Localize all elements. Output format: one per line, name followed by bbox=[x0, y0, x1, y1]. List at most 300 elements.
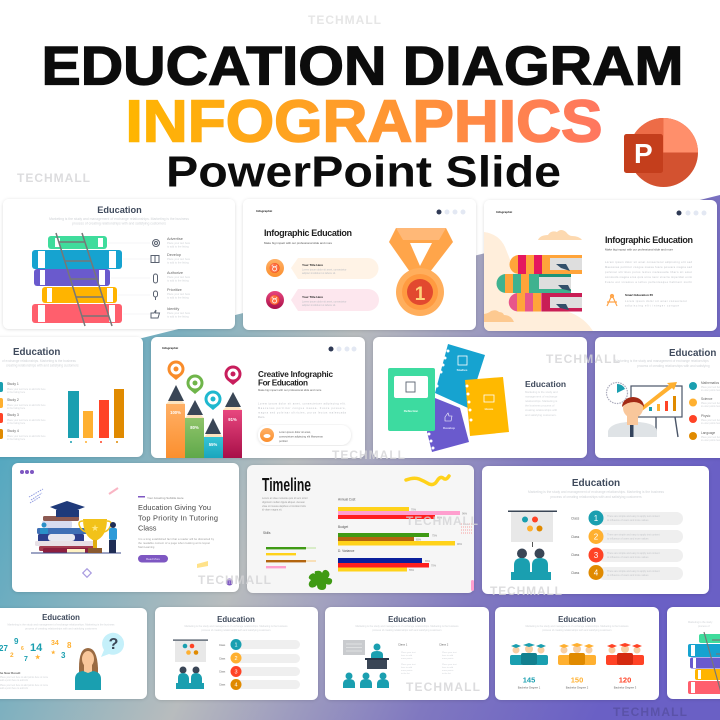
floating numbers: 14 bbox=[30, 642, 43, 654]
ladder bbox=[56, 233, 112, 326]
teacher figure bbox=[365, 644, 389, 669]
speech bubble bbox=[101, 633, 124, 657]
statistics bbox=[523, 676, 631, 684]
pagination dots bbox=[436, 210, 466, 214]
paragraph bbox=[262, 497, 308, 512]
floating numbers: 34 bbox=[51, 640, 59, 647]
study list: to the listing here bbox=[7, 422, 26, 425]
blue note bbox=[435, 344, 485, 408]
description bbox=[49, 217, 189, 226]
item descriptions: to add to the listing bbox=[167, 296, 189, 300]
pencils bbox=[166, 385, 242, 458]
class columns: Place your text bbox=[442, 663, 457, 666]
slide: numbers and question bbox=[0, 608, 147, 699]
statistics: 150 bbox=[571, 676, 583, 684]
projector screen bbox=[173, 640, 208, 662]
gradient background bbox=[0, 195, 720, 720]
pencils: 91% bbox=[228, 417, 237, 422]
callout: orange: Lorem ipsum dolor sit amet, consectetur bbox=[302, 268, 347, 272]
item descriptions: Place your text here bbox=[167, 292, 191, 296]
result text: add a point here to add info bbox=[0, 679, 29, 682]
bars bbox=[68, 389, 124, 443]
result text: add a point here to add info bbox=[0, 687, 29, 690]
class columns: here to add bbox=[442, 654, 454, 657]
decorations bbox=[29, 488, 208, 577]
class labels: Class bbox=[219, 644, 226, 647]
paragraph bbox=[258, 402, 347, 419]
heading: Education bbox=[558, 615, 596, 624]
callout: pink bbox=[266, 289, 379, 311]
subject list: Language bbox=[701, 431, 715, 435]
watermarks bbox=[17, 13, 620, 694]
class columns: Class 1 bbox=[398, 642, 408, 646]
floating numbers: ★ bbox=[51, 650, 56, 656]
title: Infographics: INFOGRAPHICS bbox=[126, 88, 602, 154]
paragraph: It is a long established fact that a reader will be distracted by bbox=[138, 537, 215, 541]
slide: bar chart bbox=[0, 337, 143, 457]
numbered circles: 3 bbox=[234, 670, 238, 676]
heading: Education bbox=[217, 615, 255, 624]
paragraph: management of exchange bbox=[525, 394, 558, 398]
paragraph: vitae sit massa dapibus ut tincidunt felis bbox=[262, 505, 307, 508]
annual cost chart: Annual Cost bbox=[338, 498, 355, 502]
description: Marketing is the study and management of exchange relationships. Marketing is the business bbox=[528, 490, 664, 494]
numbered circles: 4 bbox=[594, 568, 599, 578]
callout: orange: Your Title Here bbox=[302, 263, 323, 267]
connector lines bbox=[108, 243, 150, 314]
pill text: to influence of users and more values bbox=[607, 538, 649, 540]
yellow note: Ideate bbox=[485, 407, 494, 411]
class columns: more points bbox=[401, 669, 413, 672]
slides collage bbox=[0, 199, 720, 700]
numbered circles: 1 bbox=[594, 514, 599, 523]
description: process of creating relationships with and satisfying customers bbox=[201, 629, 271, 632]
budget chart: 75% bbox=[432, 534, 438, 538]
class columns: to the list bbox=[401, 672, 410, 675]
subject list bbox=[689, 381, 720, 442]
statistic labels bbox=[518, 686, 637, 690]
description: process of creating relationships with and satisfying customers bbox=[550, 495, 642, 499]
heading: Class bbox=[138, 524, 157, 532]
paragraph: relationships. Marketing is bbox=[525, 399, 558, 403]
callout: pink: adipisci incididunt ut labore sit. bbox=[302, 304, 336, 307]
class labels: Class bbox=[219, 658, 226, 660]
statistics: 120 bbox=[619, 676, 631, 684]
students bbox=[511, 548, 551, 580]
description: of exchange relationships. Marketing is the business bbox=[2, 359, 76, 363]
class labels bbox=[571, 516, 580, 575]
green card bbox=[388, 368, 435, 431]
class columns bbox=[398, 642, 457, 675]
budget chart bbox=[338, 525, 463, 546]
annual cost chart bbox=[338, 498, 468, 520]
cloud: top bbox=[538, 230, 582, 240]
title: PowerPoint Slide: PowerPoint Slide bbox=[166, 148, 561, 196]
numbered circles bbox=[588, 510, 604, 580]
brand label: Infographic bbox=[496, 210, 513, 214]
item descriptions bbox=[167, 241, 191, 318]
heading bbox=[138, 503, 218, 532]
item labels: Prioritize bbox=[167, 288, 182, 292]
slide: stacked books with text bbox=[484, 200, 717, 331]
result text bbox=[0, 671, 49, 690]
purple note: Develop bbox=[443, 426, 455, 430]
watermark: dark: TECHMALL bbox=[613, 705, 687, 719]
statistic labels: Bachelor Degree 2 bbox=[566, 686, 589, 690]
description: Marketing is the study bbox=[688, 621, 713, 624]
green card: Reflection bbox=[404, 409, 418, 413]
paragraph: the readable content of a page when looking at its layout bbox=[138, 541, 210, 545]
graduation cap bbox=[50, 501, 85, 517]
pill text: There are simple and easy to apply text content bbox=[607, 552, 660, 555]
whiteboard bbox=[343, 640, 365, 655]
description: Marketing is the study and management of exchange relationships. Marketing is the business bbox=[49, 217, 189, 221]
callout: pink: Lorem ipsum dolor sit amet, consectetur bbox=[302, 300, 347, 304]
paragraph: Lorem ipsum dolor sit amet consectetur adipiscing elit sed bbox=[605, 260, 693, 264]
callout: orange: ♉ bbox=[269, 262, 281, 273]
variance chart bbox=[338, 549, 437, 572]
icon: compass bbox=[607, 294, 617, 306]
heading: Education bbox=[525, 379, 566, 389]
subject list: Science bbox=[701, 397, 713, 401]
paragraph: dignissim nullam ligula aliquet. Aenean bbox=[262, 501, 306, 504]
description bbox=[525, 625, 629, 632]
slide: presenter bbox=[595, 337, 720, 458]
slide: medal bbox=[243, 199, 476, 330]
pill text bbox=[607, 515, 660, 577]
description bbox=[2, 359, 79, 368]
graduates: teal bbox=[510, 643, 548, 665]
heading: Education bbox=[572, 478, 620, 489]
floating numbers bbox=[0, 637, 72, 663]
description: Marketing is the study and management of exchange relationships. Marketing is the business bbox=[525, 625, 629, 628]
description: process of creating relationships with and satisfying customers bbox=[372, 629, 442, 632]
subheading: Make big impact with our professional slide and more bbox=[264, 241, 333, 245]
description: Marketing is the study and management of exchange relationships. Marketing is the business bbox=[355, 625, 459, 628]
class labels: Class bbox=[571, 516, 580, 520]
books illustration bbox=[31, 516, 121, 554]
class columns: to the list bbox=[442, 672, 451, 675]
callout: pink: Your Title Here bbox=[302, 295, 323, 299]
skills chart bbox=[263, 531, 316, 568]
yellow note bbox=[465, 377, 509, 436]
class labels: Class bbox=[571, 535, 580, 539]
seated student bbox=[40, 522, 48, 534]
class columns: Place your text bbox=[442, 651, 457, 654]
heading bbox=[258, 370, 333, 388]
class columns: more points bbox=[442, 657, 454, 660]
slide: cropped books bbox=[667, 607, 720, 699]
pill text: There are simple and easy to apply text content bbox=[607, 570, 660, 573]
watermarks: TECHMALL bbox=[17, 171, 90, 185]
clock bbox=[606, 382, 628, 404]
heading: Timeline bbox=[262, 475, 311, 495]
numbered circles: 2 bbox=[234, 656, 238, 662]
study list: to the listing here bbox=[7, 407, 26, 410]
green splash bbox=[309, 570, 332, 590]
icons bbox=[151, 240, 160, 318]
books illustration bbox=[496, 255, 582, 312]
pill text: There are simple and easy to apply text content bbox=[607, 534, 660, 536]
item labels: Develop bbox=[167, 253, 181, 257]
paragraph: Lorem ipsum dolor sit amet, consectetuer adipiscing elit. bbox=[258, 402, 346, 406]
paragraph: Start Learning bbox=[138, 545, 155, 549]
paragraph: commodo magna eros quis urna nunc viverra imperdiet enim bbox=[605, 275, 692, 279]
class columns: here to add bbox=[401, 666, 413, 669]
trophy bbox=[79, 519, 111, 553]
page number bbox=[226, 578, 233, 586]
description bbox=[688, 621, 713, 628]
description: Marketing is the study and management of exchange relationships. Marketing is the business bbox=[8, 622, 115, 626]
paragraph: Fusce est vivamus a tellus pellentesque habitant morbi bbox=[605, 280, 692, 284]
yellow squiggle bbox=[406, 476, 449, 485]
result text: Place your text here to add points here or more bbox=[0, 684, 49, 687]
watermarks: TECHMALL bbox=[332, 448, 405, 462]
presenter figure bbox=[608, 397, 657, 437]
item descriptions: Place your text here bbox=[167, 275, 191, 279]
slide: notebook cards bbox=[373, 337, 587, 458]
paragraph: creating relationships with bbox=[525, 408, 558, 412]
pencils: 80% bbox=[190, 425, 199, 430]
dot grid bbox=[461, 524, 472, 533]
numbered circles: 1 bbox=[234, 642, 238, 648]
item descriptions: Place your text here bbox=[167, 311, 191, 315]
paragraph: Maecenas porttitor congue massa fusce posuere magna sed bbox=[605, 265, 693, 269]
watermarks: TECHMALL bbox=[490, 584, 562, 598]
item descriptions: to add to the listing bbox=[167, 314, 189, 318]
study list: Place your text here to add info here bbox=[7, 388, 46, 391]
feature text: adipiscing elit integer congue bbox=[625, 304, 680, 308]
paragraph: id vitae magna sit. bbox=[262, 508, 282, 512]
paragraph: pulvinar ultricies purus lectus malesuada libero sit amet bbox=[605, 270, 692, 274]
class labels bbox=[219, 644, 226, 686]
variance chart: 70% bbox=[431, 564, 437, 568]
class labels: Class bbox=[571, 571, 580, 575]
binding holes bbox=[428, 350, 472, 450]
statistic labels: Bachelor Degree 3 bbox=[614, 686, 637, 690]
heading: Education bbox=[388, 615, 426, 624]
pagination dots bbox=[328, 346, 356, 352]
callout: orange: adipisci incididunt ut labore sit. bbox=[302, 272, 336, 275]
slide: class list bbox=[482, 466, 709, 594]
heading: Top Priority In Tutoring bbox=[138, 514, 218, 522]
item labels: Identify bbox=[167, 307, 179, 311]
student figures bbox=[343, 672, 389, 688]
annual cost chart: 96% bbox=[462, 512, 468, 516]
woman figure bbox=[75, 648, 101, 690]
budget chart: 90% bbox=[457, 543, 463, 546]
class labels: Class bbox=[219, 684, 226, 686]
slide: books and ladder bbox=[3, 199, 235, 329]
heading: For Education bbox=[258, 378, 308, 388]
watermarks: TECHMALL bbox=[308, 13, 381, 27]
feature text bbox=[625, 293, 687, 308]
floating numbers: 2 bbox=[10, 652, 14, 659]
floating numbers: 6 bbox=[21, 646, 24, 652]
icon: PowerPoint logo bbox=[624, 118, 698, 187]
description: process of creating relationships with and satisfying customers bbox=[25, 626, 98, 630]
description: process of bbox=[698, 625, 710, 628]
purple note bbox=[427, 398, 469, 452]
study list: to the listing here bbox=[7, 438, 26, 441]
book stack bbox=[688, 634, 720, 694]
floating numbers: 7 bbox=[24, 656, 28, 663]
paragraph bbox=[605, 260, 693, 284]
heading: Infographic Education bbox=[605, 235, 693, 245]
statistics: 145 bbox=[523, 676, 535, 684]
info pill: porttitor bbox=[279, 439, 288, 443]
heading: Infographic Education bbox=[264, 228, 352, 238]
variance chart: 55% bbox=[409, 569, 415, 572]
class labels: Class bbox=[219, 670, 226, 674]
description: creating relationships with and satisfying customers bbox=[6, 364, 79, 368]
feature text: Smart Education 65 bbox=[625, 293, 653, 297]
student figure bbox=[109, 522, 117, 553]
annual cost chart: 70% bbox=[411, 508, 417, 512]
callout: pink: ♉ bbox=[269, 294, 281, 305]
description: process of creating relationships with and satisfying customers bbox=[72, 222, 166, 226]
presentation board bbox=[631, 382, 682, 437]
cloud: bottom bbox=[484, 310, 514, 322]
paragraph: magna sed pulvinar ultricies, purus lectus malesuada bbox=[258, 410, 347, 414]
item labels: Authorize bbox=[167, 271, 183, 275]
numbered circles bbox=[230, 639, 242, 690]
statistic labels: Bachelor Degree 1 bbox=[518, 686, 541, 690]
budget chart: Budget bbox=[338, 525, 348, 529]
description: process of creating relationships with and satisfying bbox=[637, 364, 710, 368]
heading: Education bbox=[42, 613, 80, 622]
description bbox=[615, 359, 710, 368]
study list: Study 2 bbox=[7, 398, 19, 402]
slide: tutoring bbox=[12, 463, 239, 592]
floating numbers: 8 bbox=[67, 641, 72, 650]
item labels bbox=[167, 237, 183, 311]
medal bbox=[389, 228, 453, 316]
button bbox=[138, 555, 168, 562]
pencils: 55% bbox=[209, 442, 217, 447]
graduates: yellow bbox=[558, 643, 596, 665]
class columns: Place your text bbox=[401, 651, 416, 654]
study list: Place your text here to add info here bbox=[7, 419, 46, 422]
projector screen bbox=[508, 510, 557, 547]
heading: Education bbox=[669, 348, 716, 359]
page number: 2 bbox=[229, 580, 231, 584]
description bbox=[528, 490, 664, 499]
paragraph: Marketing is the study and bbox=[525, 390, 558, 394]
watermarks: TECHMALL bbox=[406, 514, 478, 528]
study list: to the listing here bbox=[7, 391, 26, 394]
class columns: more points bbox=[442, 669, 454, 672]
pink edge bbox=[471, 580, 474, 591]
variance chart: D. Variance bbox=[338, 549, 355, 553]
class columns: Class 2 bbox=[439, 642, 449, 646]
item descriptions: to add to the listing bbox=[167, 278, 189, 282]
slide: pencil chart bbox=[151, 337, 365, 458]
book stack bbox=[32, 236, 122, 323]
floating numbers: 9 bbox=[14, 637, 19, 646]
paragraph: Lorem at vitae molestie quis id sem tortor bbox=[262, 497, 308, 500]
pill text: There are simple and easy to apply text content bbox=[607, 515, 660, 518]
study list: Study 3 bbox=[7, 413, 19, 417]
callout: orange bbox=[266, 258, 378, 279]
variance chart: 65% bbox=[425, 560, 431, 563]
item descriptions: Place your text here bbox=[167, 241, 191, 245]
class pills bbox=[236, 640, 300, 689]
description bbox=[184, 625, 288, 632]
info pill: Lorem ipsum dolor sit amet, bbox=[279, 430, 311, 434]
item descriptions: Place your text here bbox=[167, 257, 191, 261]
pill text: to influence of users and more values bbox=[607, 519, 649, 522]
study list: Study 4 bbox=[7, 429, 19, 433]
numbered circles: 2 bbox=[594, 532, 599, 542]
floating numbers: 3 bbox=[61, 651, 66, 660]
paragraph: Maecenas porttitor congue massa. Fusce posuere, bbox=[258, 406, 346, 410]
button: Read More bbox=[146, 557, 160, 561]
slide: timeline bbox=[247, 465, 474, 593]
brand label: Infographic bbox=[256, 209, 273, 213]
subheading: Make big impact with our professional slide and more bbox=[605, 248, 674, 252]
paragraph bbox=[138, 537, 215, 549]
pill text: to influence of users and more values bbox=[607, 556, 649, 559]
study list: Study 1 bbox=[7, 382, 19, 386]
class labels: Class bbox=[571, 553, 580, 557]
medal: 1 bbox=[415, 284, 426, 305]
item labels: Advertise bbox=[167, 237, 183, 241]
class columns: more points bbox=[401, 657, 413, 660]
annual cost chart: 80% bbox=[437, 516, 443, 520]
floating numbers: ★ bbox=[35, 654, 41, 661]
description: Marketing is the study and management of exchange relationships bbox=[615, 359, 709, 363]
skills chart: Skills bbox=[263, 531, 271, 535]
slide: small class list bbox=[155, 607, 318, 700]
description: process of creating relationships with and satisfying customers bbox=[542, 629, 612, 632]
students bbox=[176, 666, 204, 689]
class columns: Place your text bbox=[401, 663, 416, 666]
study list bbox=[0, 382, 46, 441]
description bbox=[355, 625, 459, 632]
pencils: 100% bbox=[170, 410, 181, 415]
brand label: Infographic bbox=[162, 346, 179, 350]
heading: Creative Infographic bbox=[258, 370, 333, 379]
info pill bbox=[258, 425, 351, 445]
slide: graduates bbox=[495, 607, 659, 700]
subheading: Make big impact with our professional slide and more bbox=[258, 388, 322, 392]
info pill: consectetuer adipiscing elit Maecenas bbox=[279, 434, 324, 438]
heading: Education bbox=[13, 347, 60, 358]
pins bbox=[168, 360, 242, 410]
slide: teacher and students bbox=[325, 607, 489, 700]
description bbox=[8, 622, 115, 630]
watermarks: TECHMALL bbox=[406, 680, 480, 694]
heading: Education Giving You bbox=[138, 503, 211, 512]
pagination dots bbox=[676, 210, 706, 216]
item descriptions: to add to the listing bbox=[167, 260, 189, 264]
feature text: Lorem ipsum dolor sit amet consectetur bbox=[625, 299, 687, 303]
graduates: red bbox=[606, 643, 644, 665]
numbered circles: 4 bbox=[234, 682, 238, 688]
watermarks: TECHMALL bbox=[198, 573, 271, 587]
tagline: Your Amazing Subtitle Here bbox=[147, 496, 184, 500]
result text: Place your text here to add points here or more bbox=[0, 676, 49, 679]
menu dots bbox=[20, 470, 34, 474]
title: Education Diagram: EDUCATION DIAGRAM bbox=[42, 34, 684, 96]
study list: Place your text here to add info here bbox=[7, 404, 46, 407]
class pills bbox=[598, 512, 683, 580]
trophy: ★ bbox=[91, 523, 99, 533]
item descriptions: to add to the listing bbox=[167, 244, 189, 248]
watermarks: TECHMALL bbox=[546, 352, 620, 366]
study list: Place your text here to add info here bbox=[7, 435, 46, 438]
